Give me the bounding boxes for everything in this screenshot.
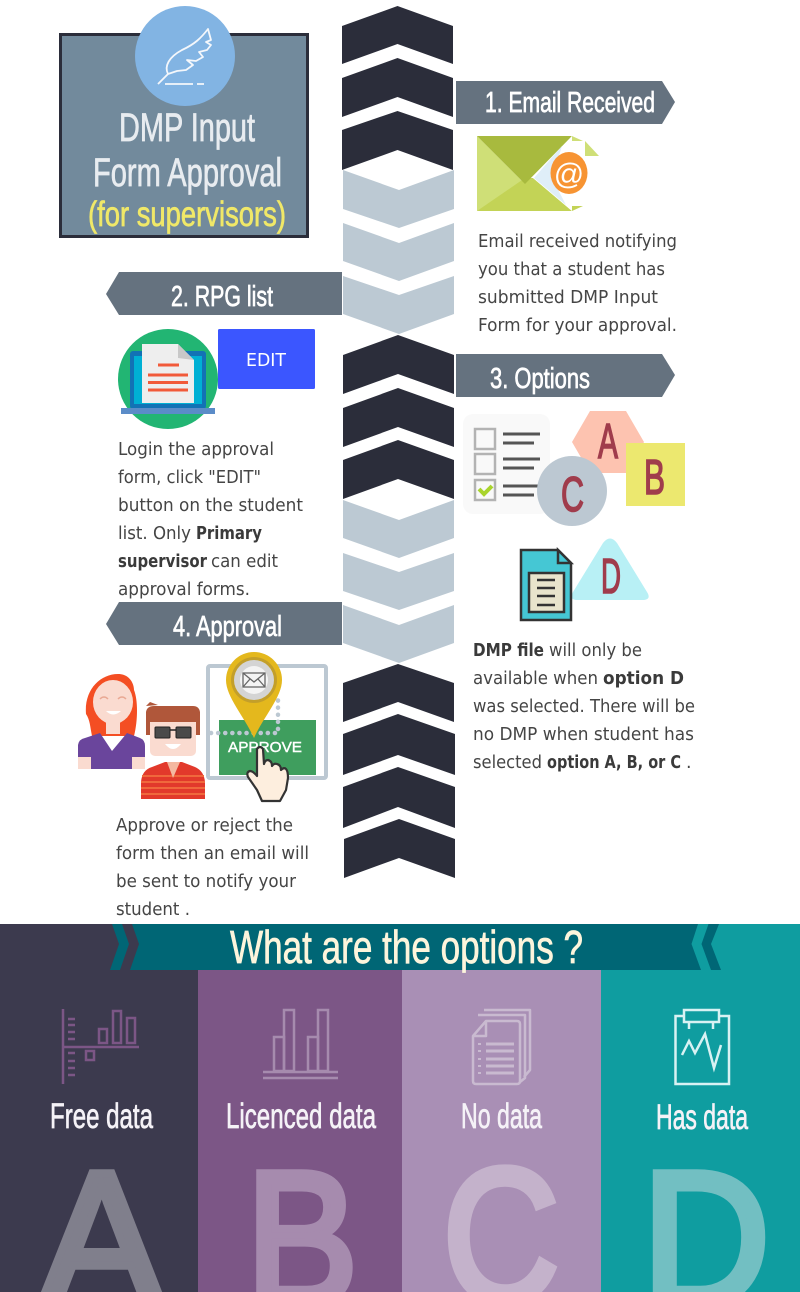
icon: options checklist with shapes [463, 411, 685, 620]
option B square [626, 443, 685, 506]
option B square: B [644, 451, 665, 505]
step 3 ribbon: 3. Options [490, 363, 590, 395]
text: step 3 description: option D [603, 669, 684, 689]
step 2 ribbon [106, 272, 342, 315]
title text: (for supervisors) [88, 195, 286, 234]
option C circle [537, 456, 607, 526]
step 1 ribbon [456, 81, 675, 124]
text: step 1 description: submitted DMP Input [478, 288, 658, 308]
text: step 2 description: Login the approval [118, 440, 274, 460]
label: no data: No data [461, 1097, 542, 1136]
icon: man with sunglasses [141, 702, 205, 799]
option D triangle: D [601, 550, 621, 604]
banner: what are the options: What are the options ? [230, 921, 583, 973]
text: step 4 description: be sent to notify your [116, 872, 297, 892]
text: step 1 description: you that a student has [478, 260, 665, 280]
central chevron column [342, 6, 455, 878]
option A hexagon [572, 411, 644, 473]
panel: option B licenced data [198, 970, 402, 1292]
text: step 1 description [478, 232, 677, 336]
icon: no data documents [473, 1010, 530, 1084]
text: step 3 description: option A, B, or C [547, 753, 681, 773]
step 4 ribbon [106, 602, 342, 645]
label: has data: Has data [656, 1098, 748, 1137]
icon: email envelope: @ [554, 158, 584, 191]
text: step 4 description: Approve or reject the [116, 816, 293, 836]
text: step 2 description: button on the student [118, 496, 303, 516]
title text: DMP Input [119, 106, 255, 150]
EDIT button: EDIT [246, 350, 287, 371]
panel: option D has data [601, 924, 800, 1292]
text: step 3 description: selected [473, 753, 542, 773]
text: step 3 description: no DMP when student has [473, 725, 694, 745]
icon: licenced data chart [263, 1010, 338, 1078]
label: free data: Free data [50, 1097, 153, 1136]
icon: laptop with document [118, 329, 218, 429]
option A hexagon: A [598, 415, 618, 469]
step 1 ribbon: 1. Email Received [485, 87, 655, 119]
text: step 2 description: supervisor [118, 552, 207, 572]
step 2 ribbon: 2. RPG list [171, 281, 273, 313]
icon: approve frame: APPROVE [228, 739, 302, 756]
panel: option C no data [402, 970, 601, 1292]
option D triangle [571, 538, 649, 604]
title text: Form Approval [93, 151, 282, 195]
icon: free data chart [63, 1009, 139, 1084]
text: step 1 description: Form for your approval. [478, 316, 677, 336]
title text [88, 106, 286, 234]
panel: option A free data [0, 924, 198, 1292]
icon: DMP file [521, 550, 571, 620]
icon: feather in circle [135, 6, 235, 106]
icon: email envelope [477, 136, 599, 211]
text: step 2 description: approval forms. [118, 580, 250, 600]
option C circle: C [561, 468, 584, 522]
text: step 3 description: DMP file [473, 641, 544, 661]
text: step 4 description: student . [116, 900, 190, 920]
icon: woman [78, 674, 145, 769]
title panel [60, 6, 308, 236]
icon: people and approve button [78, 652, 326, 801]
text: step 4 description: form then an email will [116, 844, 309, 864]
text: step 3 description: was selected. There will be [473, 697, 695, 717]
step 4 ribbon: 4. Approval [173, 611, 282, 643]
text: step 1 description: Email received notifying [478, 232, 677, 252]
icon: approve frame [208, 666, 326, 778]
icon: pointing hand [247, 747, 288, 801]
text: step 2 description: can edit [211, 552, 278, 572]
EDIT button [218, 329, 315, 389]
icon: has data clipboard [676, 1010, 729, 1084]
step 3 ribbon [456, 354, 675, 397]
text: step 3 description [473, 641, 695, 773]
text: step 4 description [116, 816, 309, 920]
text: step 3 description: . [686, 753, 692, 773]
text: step 3 description: will only be [549, 641, 642, 661]
text: step 2 description [118, 440, 303, 600]
text: step 2 description: Primary [196, 524, 263, 544]
text: step 2 description: form, click "EDIT" [118, 468, 261, 488]
icon: checklist [463, 414, 550, 514]
icon: location pin with envelope [226, 652, 282, 738]
label: licenced data: Licenced data [226, 1097, 376, 1136]
text: step 2 description: list. Only [118, 524, 191, 544]
text: step 3 description: available when [473, 669, 598, 689]
options section [0, 921, 800, 1292]
